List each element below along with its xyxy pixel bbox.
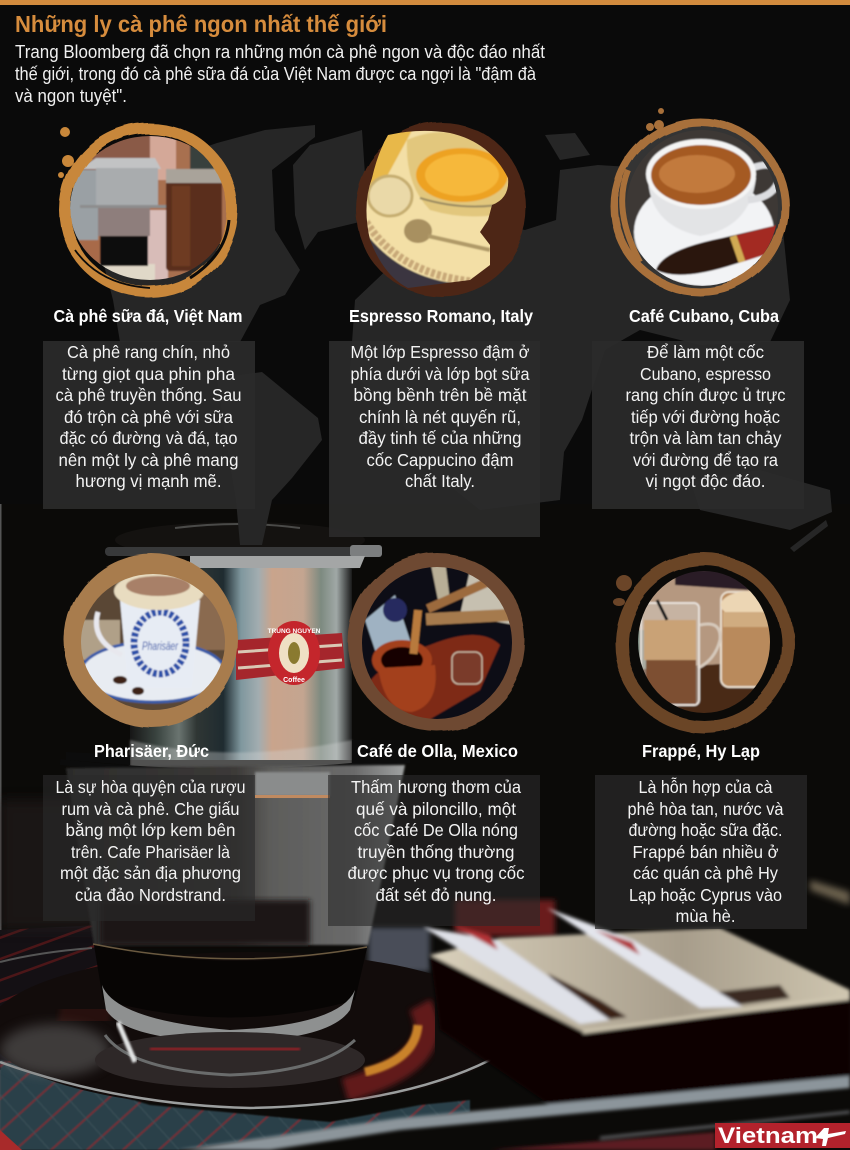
panel: Frappe description: Lạp hoặc Cyprus vào	[629, 885, 782, 905]
panel: Ca phe sua da description: Cà phê rang chín, nhỏ	[67, 342, 230, 362]
icon: espresso romano photo in brown disc	[355, 122, 527, 296]
panel: Pharisaer description: một đặc sản địa phương	[60, 863, 241, 883]
glass of dripped coffee	[66, 765, 405, 1088]
panel: Espresso Romano description: cốc Cappucino đậm	[366, 450, 514, 470]
panel: Cafe de Olla description: đất sét đỏ nung.	[376, 885, 496, 905]
panel: Pharisaer description: bằng một lớp kem bên	[66, 819, 236, 840]
panel: Espresso Romano description: Một lớp Espresso đậm ở	[350, 342, 530, 362]
tray with sugar sticks	[178, 880, 850, 1150]
panel: Espresso Romano description: chính là nét quyến rũ,	[359, 407, 521, 427]
panel: Cafe de Olla description: quế và piloncillo, một	[356, 799, 516, 819]
panel: Cafe de Olla description: Thấm hương thơm của	[351, 777, 521, 797]
world map background	[100, 125, 832, 552]
trung nguyen label on filter	[236, 621, 345, 685]
panel: Cafe Cubano description: tiếp với đường hoặc	[631, 407, 780, 427]
trung nguyen label on filter: Coffee	[283, 677, 305, 684]
panel: Espresso Romano description: đầy tinh tế của những	[358, 428, 522, 448]
icon: pharisaer photo in tan disc	[64, 553, 238, 727]
blurred table mat and saucer	[0, 800, 555, 1150]
panel: Cafe Cubano description: với đường để tạo ra	[633, 450, 778, 470]
heading: Espresso Romano: Espresso Romano, Italy	[349, 306, 533, 326]
panel: Cafe Cubano description: trộn và làm tan chảy	[630, 428, 782, 448]
panel: Ca phe sua da description	[43, 341, 255, 509]
top accent bar	[0, 0, 850, 5]
panel: Cafe de Olla description	[328, 775, 540, 926]
panel: Espresso Romano description: phía dưới và lớp bọt sữa	[350, 364, 530, 384]
panel: Pharisaer description: rum và cà phê. Che giấu	[62, 799, 240, 819]
panel: Frappe description	[595, 775, 807, 929]
panel: Espresso Romano description: chất Italy.	[405, 471, 475, 491]
icon: cafe cubano photo in brown ring	[615, 108, 795, 295]
heading: Frappe: Frappé, Hy Lạp	[642, 741, 760, 761]
background photo: coffee filter, glass and tray	[0, 504, 850, 1150]
icon: vietnam iced coffee photo in orange ring	[58, 127, 240, 292]
panel: Pharisaer description	[43, 775, 255, 921]
heading: Cafe de Olla: Café de Olla, Mexico	[357, 741, 518, 761]
panel: Ca phe sua da description: hương vị mạnh mẽ.	[76, 471, 222, 491]
title: Những ly cà phê ngon nhất thế giới	[15, 11, 387, 37]
icon: frappe photo in brown ring	[613, 559, 787, 727]
panel: Frappe description: mùa hè.	[676, 906, 736, 926]
icon: cafe de olla photo in brown disc	[348, 553, 526, 731]
panel: Ca phe sua da description: cà phê truyền thống. Sau	[56, 385, 242, 405]
intro text: và ngon tuyệt".	[15, 86, 127, 106]
icon: pharisaer photo in tan disc: Pharisäer	[142, 639, 179, 653]
panel: Cafe de Olla description: truyền thống thường	[358, 842, 514, 862]
heading: Cafe Cubano: Café Cubano, Cuba	[629, 306, 779, 326]
silver coffee filter	[60, 522, 410, 772]
panel: Frappe description: Frappé bán nhiều ở	[632, 842, 778, 862]
intro text: thế giới, trong đó cà phê sữa đá của Việt Nam được ca ngợi là "đậm đà	[15, 64, 537, 84]
panel: Frappe description: các quán cà phê Hy	[633, 863, 778, 883]
panel: Frappe description: phê hòa tan, nước và	[628, 799, 784, 819]
intro text	[15, 42, 545, 106]
heading: Pharisaer: Pharisäer, Đức	[94, 741, 209, 761]
panel: Cafe Cubano description: rang chín được ủ trực	[626, 385, 786, 405]
panel: Ca phe sua da description: đặc có đường và đá, tạo	[60, 428, 238, 448]
panel: Cafe de Olla description: cốc Café De Olla nóng	[354, 820, 518, 840]
panel: Pharisaer description: Là sự hòa quyện của rượu	[56, 777, 246, 797]
panel: Pharisaer description: của đảo Nordstrand.	[75, 885, 226, 905]
logo: Vietnam+	[715, 1123, 850, 1148]
logo: Vietnam+: Vietnam	[718, 1123, 818, 1148]
intro text: Trang Bloomberg đã chọn ra những món cà phê ngon và độc đáo nhất	[15, 42, 545, 62]
panel: Cafe de Olla description: được phục vụ trong cốc	[348, 863, 525, 883]
panel: Espresso Romano description: bồng bềnh trên bề mặt	[354, 385, 527, 405]
panel: Cafe Cubano description: vị ngọt độc đáo.	[646, 471, 766, 491]
panel: Frappe description: đường hoặc sữa đặc.	[628, 820, 782, 840]
panel: Ca phe sua da description: nên một ly cà phê mang	[58, 450, 238, 470]
panel: Cafe Cubano description	[592, 341, 804, 509]
panel: Cafe Cubano description: Để làm một cốc	[647, 342, 764, 362]
panel: Espresso Romano description	[329, 341, 540, 537]
panel: Cafe Cubano description: Cubano, espresso	[640, 364, 771, 384]
trung nguyen label on filter: TRUNG NGUYEN	[268, 628, 321, 635]
heading: Ca phe sua da: Cà phê sữa đá, Việt Nam	[54, 306, 242, 326]
panel: Ca phe sua da description: đó trộn cà phê với sữa	[64, 407, 233, 427]
panel: Pharisaer description: trên. Cafe Pharisäer là	[71, 842, 230, 862]
panel: Ca phe sua da description: từng giọt qua phin pha	[62, 364, 235, 384]
panel: Frappe description: Là hỗn hợp của cà	[638, 776, 773, 797]
